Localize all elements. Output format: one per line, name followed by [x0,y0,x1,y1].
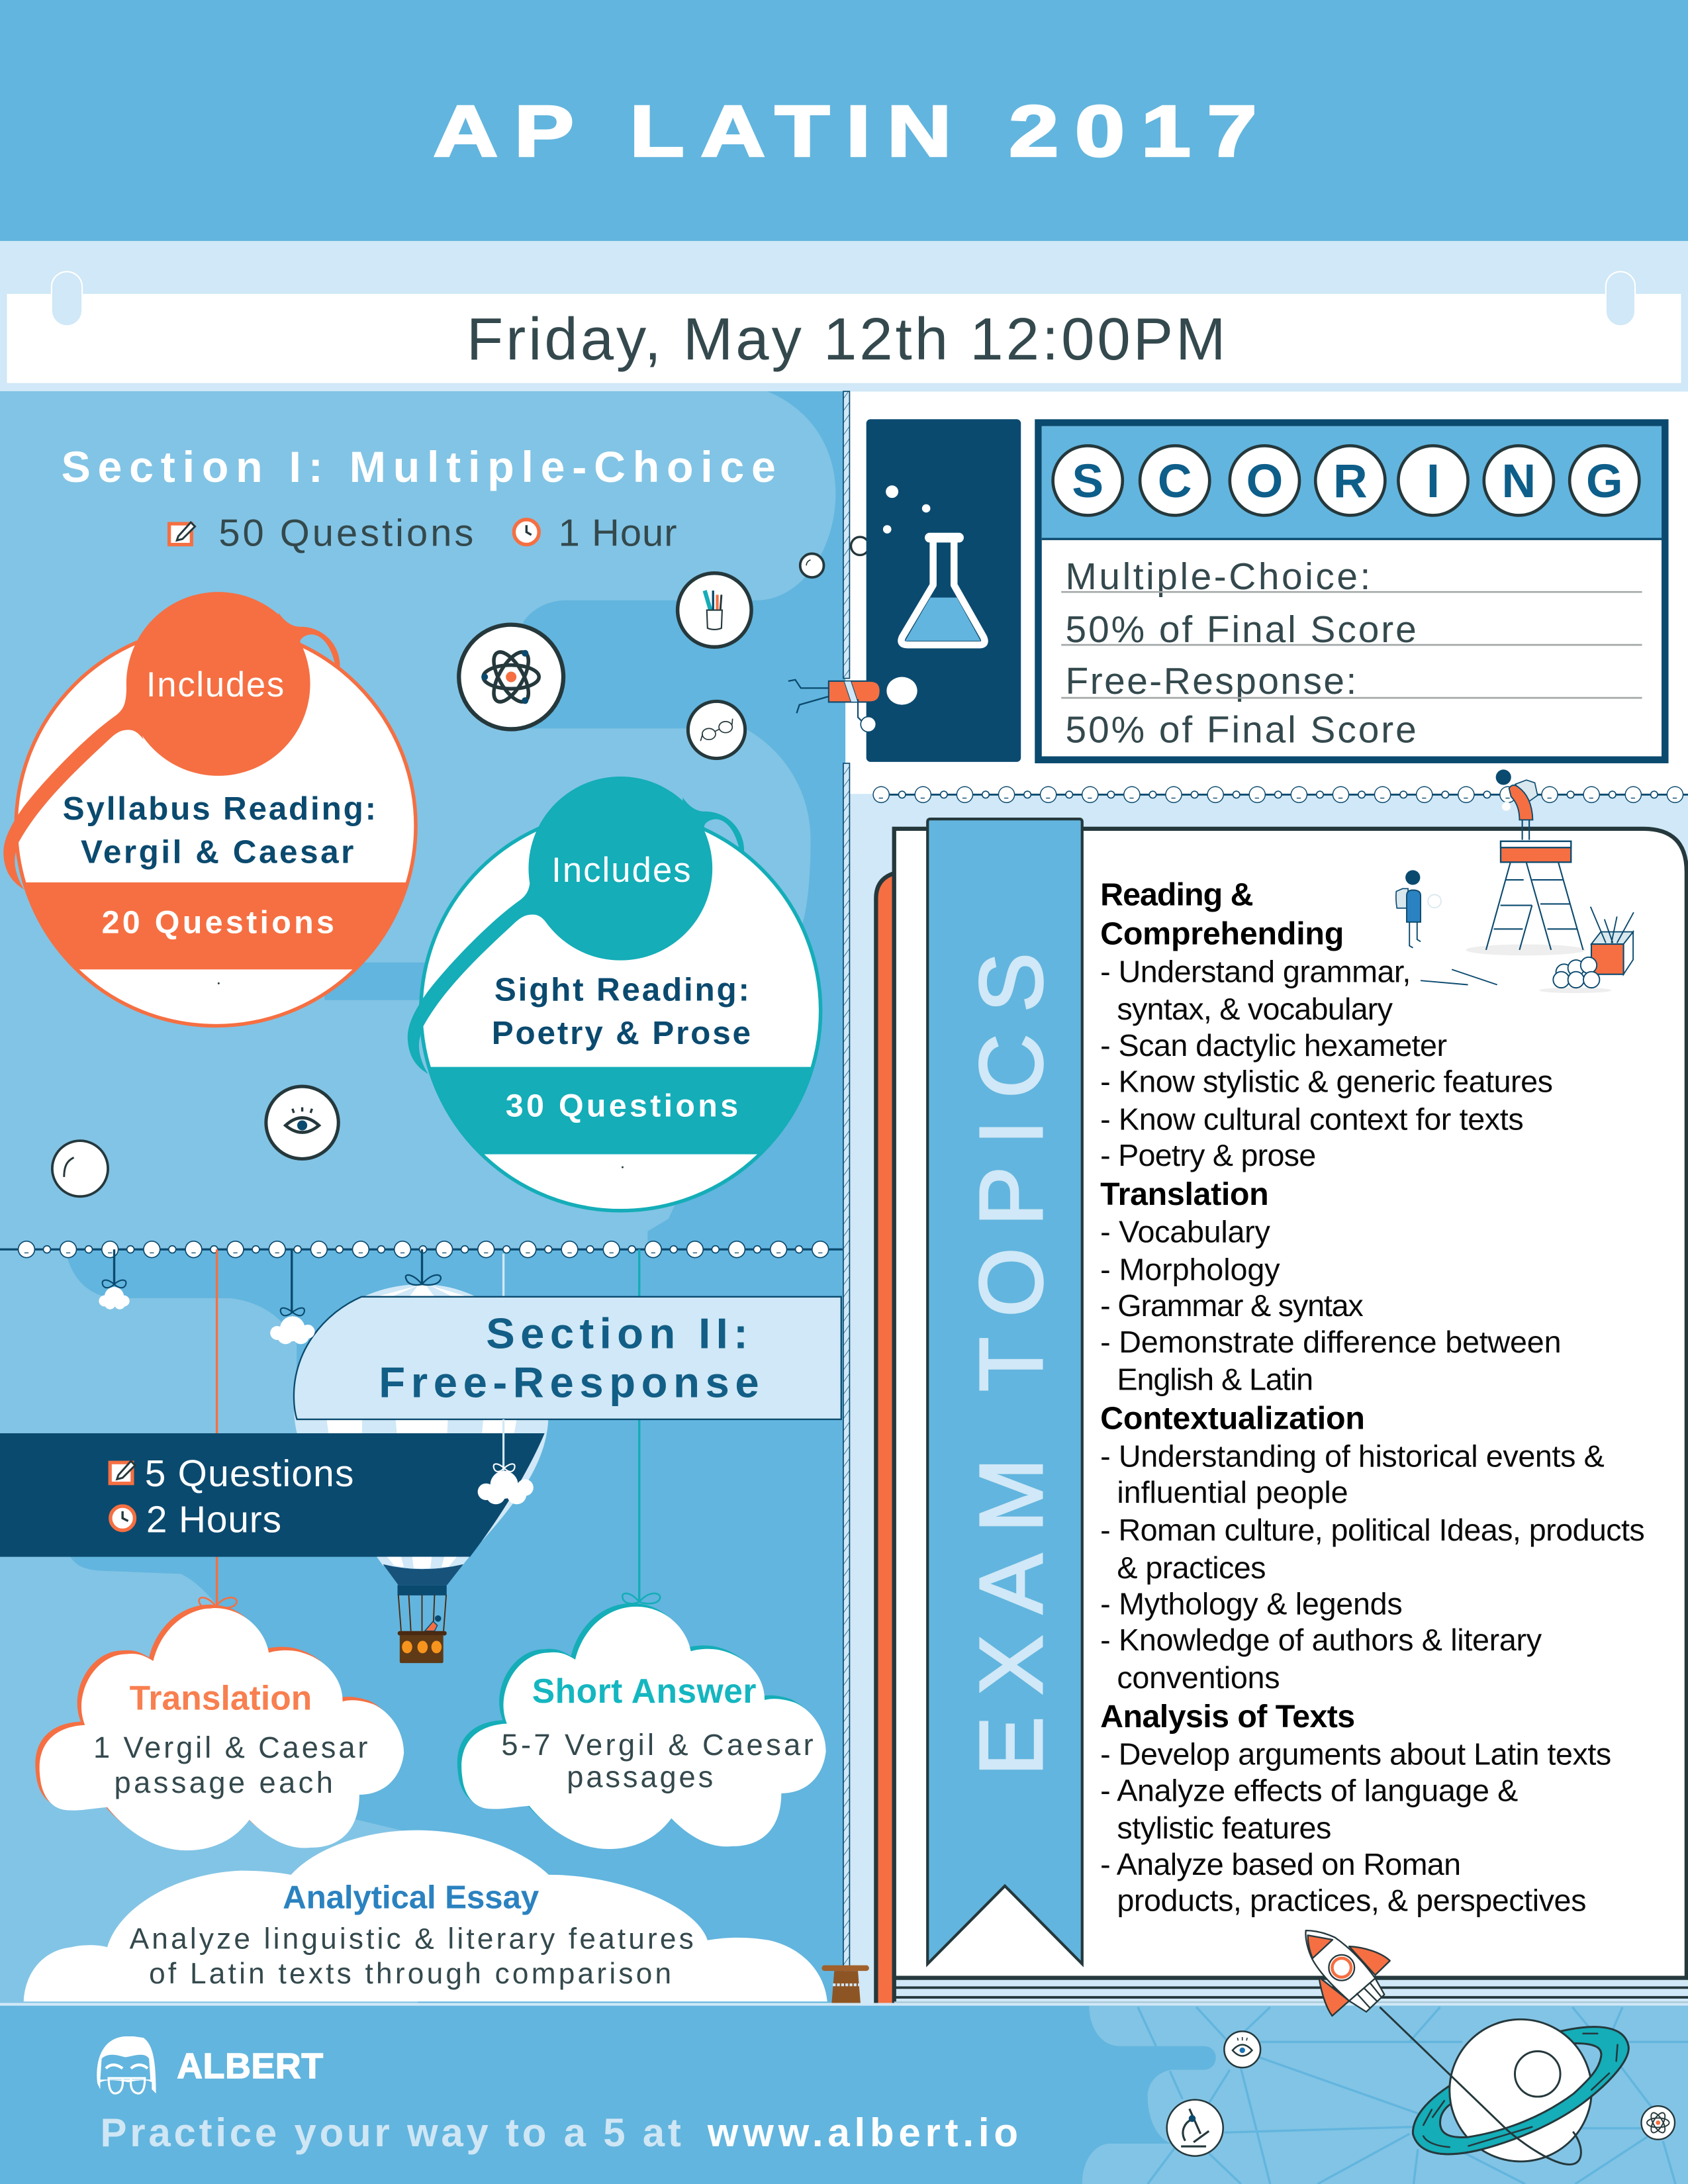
heading: Section I: Section I: Multiple-Choice [62,443,776,492]
text block: exam topic list: - Mythology & legends [1100,1586,1403,1621]
panel: Section II stats: 5 Questions [145,1453,353,1495]
panel: Section II heading [294,1297,841,1419]
footer light shape [1082,2006,1688,2184]
planet with ring [1380,2007,1628,2165]
text block: exam topic list: Translation [1100,1176,1269,1212]
panel: scoring: G [1586,455,1623,508]
teal question band [430,1067,811,1155]
panel: right background [845,391,1688,2006]
illustration: figure with backpack [1396,870,1441,948]
cloud: translation: passage each [115,1766,333,1799]
panel: sight reading bubble: Poetry & Prose [492,1015,751,1051]
title: AP LATIN 2017 [433,91,1257,172]
panel: sight reading bubble [404,777,835,1211]
syllabus text: Syllabus Reading: [63,790,376,827]
cloud: translation [35,1597,404,1850]
figure: climber on divider [788,680,880,732]
panel: Section II heading: Section II: [486,1309,748,1358]
text block: exam topic list: - Demonstrate difference between [1100,1325,1562,1359]
icon: note [169,522,195,545]
cloud: analytical essay: Analyze linguistic & literary features [130,1923,694,1955]
bubble: small [800,553,823,577]
text block: exam topic list: Analysis of Texts [1100,1699,1355,1734]
illustration: person on platform [1496,769,1538,840]
text block: exam topic list: Contextualization [1100,1401,1365,1437]
panel: syllabus reading bubble [0,592,432,1026]
hatched divider [843,391,849,2006]
dock post [821,1966,869,2006]
text block: exam topic list: syntax, & vocabulary [1117,992,1393,1026]
icon: flask panel [867,419,1021,762]
icon: clock [514,520,539,545]
illustration: ladder with platform [1466,841,1585,955]
30 questions: 30 Questions [506,1088,738,1123]
balloon basket [397,1585,447,1663]
cloud: translation: 1 Vergil & Caesar [93,1731,367,1764]
scoring rows: Multiple-Choice: [1066,556,1370,598]
ribbon: exam topics: EXAM TOPICS [961,953,1061,1776]
small cloud 2 [270,1308,314,1344]
cloud: short answer [457,1593,826,1849]
panel: left background shapes [0,391,844,2006]
bead string: right [873,794,1688,798]
text block: exam topic list: - Analyze based on Roman [1100,1847,1461,1881]
text block: exam topic list: - Analyze effects of language & [1100,1773,1518,1807]
small cloud 1 [99,1280,130,1309]
icon: clock [111,1506,134,1531]
cloud: short answer: passages [567,1760,713,1793]
text block: exam topic list: - Understand grammar, [1100,954,1411,988]
logo: albert head [97,2036,156,2093]
panel: sight reading bubble: Includes [551,851,691,890]
icon: pencil cup [678,573,751,647]
text block: exam topic list: products, practices, & perspectives [1117,1883,1586,1918]
text block: exam topic list: Reading & [1100,877,1254,913]
text block: exam topic list: - Scan dactylic hexameter [1100,1028,1447,1063]
cloud: short answer: Short Answer [532,1672,756,1710]
balloon lower stripes [377,1557,469,1569]
scoring rows: 50% of Final Score [1066,609,1417,651]
text block: exam topic list: English & Latin [1117,1362,1313,1397]
icon: small atom [1642,2106,1675,2140]
panel: scoring: I [1427,455,1440,508]
cloud: analytical essay: Analytical Essay [283,1879,539,1915]
panel: Section II stats [0,1433,545,1557]
includes tail and handle [408,798,744,1074]
panel: syllabus reading bubble: Includes [146,665,284,704]
text: 1 Hour: 1 Hour [559,512,677,555]
icon: footer eye [1224,2031,1260,2067]
text block: exam topic list: - Know stylistic & generic features [1100,1065,1553,1099]
text block: exam topic list: influential people [1117,1475,1348,1509]
url: www.albert.io [707,2111,1018,2155]
panel: scoring: R [1333,455,1368,508]
panel: Section II heading: Free-Response [379,1358,759,1406]
cloud: analytical essay [24,1830,827,2001]
text block: exam topic list: - Grammar & syntax [1100,1288,1364,1323]
panel: scoring: S [1072,455,1103,508]
icon: note [110,1461,135,1484]
text block: exam topic list: - Morphology [1100,1253,1280,1287]
sight reading text: Sight Reading: [494,972,749,1008]
illustration: box of sticks and balls [1421,907,1634,993]
date banner [0,241,1688,391]
includes tail and handle [3,613,340,889]
panel: scoring: C [1158,455,1192,508]
rocket [1305,1930,1390,2016]
cloud: translation: Translation [130,1679,312,1717]
bow [199,1597,237,1607]
text block: exam topic list: & practices [1117,1550,1266,1585]
icon: glasses [688,701,745,759]
cloud: short answer: 5-7 Vergil & Caesar [501,1728,814,1762]
small cloud 3 with string [478,1419,534,1504]
panel: scoring [1039,423,1665,760]
bead string: left [0,1249,843,1253]
text block: exam topic list: - Know cultural context for texts [1100,1102,1524,1136]
text block: exam topic list: - Poetry & prose [1100,1138,1316,1172]
footer [0,2003,1688,2184]
icon: eye [266,1086,338,1159]
date banner: Friday, May 12th 12:00PM [467,306,1225,373]
book spine [876,873,894,2006]
book pages [894,829,1688,2002]
hot air balloon [294,1275,548,1585]
hanging strings [115,1249,639,1607]
text block: exam topic list: conventions [1117,1660,1280,1695]
panel: syllabus reading bubble: Vergil & Caesar [81,833,353,870]
bubble: small 2 [851,537,869,555]
text block: exam topic list: - Understanding of historical events & [1100,1439,1605,1473]
text block: exam topic list: - Knowledge of authors & literary [1100,1623,1542,1657]
orange question band [26,882,406,969]
scoring letters [1053,446,1639,515]
panel: Section II stats: 2 Hours [146,1499,281,1541]
panel: scoring: O [1246,455,1283,508]
text block: exam topic list: - Vocabulary [1100,1215,1270,1249]
logo: albert wordmark: ALBERT [177,2046,323,2086]
cloud: analytical essay: of Latin texts through comparison [149,1958,671,1990]
panel: scoring: N [1502,455,1536,508]
scoring rows: Free-Response: [1066,661,1356,702]
scoring rows: 50% of Final Score [1066,709,1417,751]
scoring rows [1066,556,1417,751]
header band [0,0,1688,241]
text block: exam topic list: - Develop arguments about Latin texts [1100,1737,1611,1772]
bow [622,1593,660,1603]
20 questions: 20 Questions [102,905,334,941]
includes head [126,592,310,776]
text block: exam topic list: Comprehending [1100,916,1344,951]
text block: exam topic list [1100,877,1645,1918]
call to action: Practice your way to a 5 at [100,2111,681,2155]
bubble: large [52,1141,108,1196]
ribbon: exam topics [927,819,1082,1964]
text: 50 Questions: 50 Questions [218,512,473,555]
network lines [1138,2007,1688,2184]
scoring header [1042,426,1662,539]
icon: atom [459,625,563,729]
includes head [528,777,712,961]
text block: exam topic list: - Roman culture, political Ideas, products [1100,1513,1645,1547]
icon: microscope [1167,2100,1223,2156]
text block: exam topic list: stylistic features [1117,1811,1331,1845]
